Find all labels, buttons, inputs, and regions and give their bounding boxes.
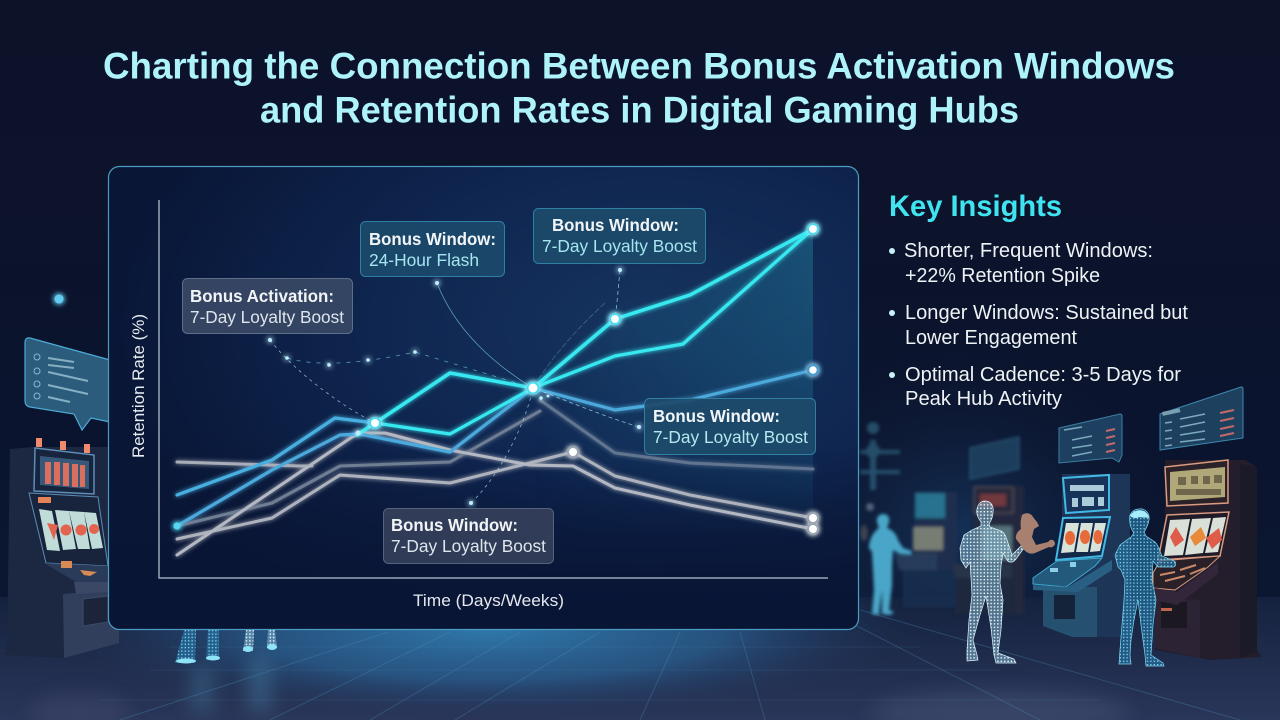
distant slot machines xyxy=(860,422,1024,614)
connector dots xyxy=(268,268,641,505)
orange slot machine xyxy=(1153,460,1262,660)
cyan machine deck xyxy=(1033,558,1102,587)
title: and Retention Rates in Digital Gaming Hubs xyxy=(260,90,1019,130)
cyan slot machine xyxy=(1033,474,1133,637)
heading: Key Insights xyxy=(889,190,1062,223)
callout: 7-Day bottom xyxy=(384,508,554,564)
callout: Bonus Activation xyxy=(182,278,352,334)
callout: 7-Day bottom: 7-Day Loyalty Boost xyxy=(391,536,546,556)
orange machine hologram screen xyxy=(1160,387,1243,450)
callout connectors xyxy=(270,270,639,503)
insight 1 xyxy=(889,240,1153,287)
brown figure xyxy=(1016,513,1055,554)
insight 1: +22% Retention Spike xyxy=(905,265,1100,287)
callout: 7-Day top: 7-Day Loyalty Boost xyxy=(542,236,697,256)
far cross hologram xyxy=(860,422,900,490)
callout: 24-Hour Flash xyxy=(360,222,504,276)
insight 3: Peak Hub Activity xyxy=(905,388,1062,410)
title xyxy=(103,46,1175,130)
orange machine deck xyxy=(1153,556,1220,590)
insight 2: Lower Engagement xyxy=(905,327,1077,349)
panel: chart xyxy=(108,166,858,630)
line: dark gray xyxy=(177,411,540,526)
floating light dot xyxy=(54,294,64,304)
x axis label: Time (Days/Weeks) xyxy=(413,592,564,610)
callout: Bonus Activation: Bonus Activation: xyxy=(190,286,334,306)
line: cyan low xyxy=(375,229,813,434)
data point markers xyxy=(174,224,818,534)
callout: 7-Day right: 7-Day Loyalty Boost xyxy=(653,427,808,447)
orange machine screen xyxy=(1165,460,1228,506)
insight 2: Longer Windows: Sustained but xyxy=(905,302,1188,324)
mid hologram screen xyxy=(970,437,1019,479)
line: blue xyxy=(177,370,813,526)
machine body xyxy=(3,447,119,658)
line: silver upper xyxy=(177,433,813,555)
callout: 24-Hour Flash: Bonus Window: xyxy=(369,229,496,249)
hologram figure: far left xyxy=(869,514,912,615)
far dots xyxy=(860,503,874,541)
callout: Bonus Activation: 7-Day Loyalty Boost xyxy=(190,307,344,327)
machine reels xyxy=(29,493,108,566)
mid machine xyxy=(952,486,1024,614)
y axis label: Retention Rate (%) xyxy=(130,314,148,458)
insight 3: Optimal Cadence: 3-5 Days for xyxy=(905,364,1181,386)
hologram figure: white xyxy=(960,501,1024,663)
machine lights xyxy=(36,438,90,453)
callout: 7-Day top: Bonus Window: xyxy=(552,215,679,235)
hologram figure: blue xyxy=(1115,509,1176,666)
title: Charting the Connection Between Bonus Activation Windows xyxy=(103,46,1175,86)
insight 2 xyxy=(889,302,1188,349)
chart area glow xyxy=(618,234,813,504)
callout: 7-Day right xyxy=(644,398,816,454)
callout: 7-Day top xyxy=(534,208,706,264)
line: silver lower xyxy=(177,452,813,539)
line: dark gray falling xyxy=(540,400,813,469)
chart axes xyxy=(159,200,828,578)
machine deck xyxy=(44,563,108,582)
line: cyan high xyxy=(357,229,813,435)
line: sky blue xyxy=(177,418,375,495)
line chart xyxy=(177,229,813,555)
callout: 7-Day bottom: Bonus Window: xyxy=(391,515,518,535)
cyan machine hologram screen xyxy=(1059,414,1122,463)
left slot machine xyxy=(3,438,119,658)
hologram legs under chart panel xyxy=(175,630,277,712)
cyan machine reels xyxy=(1056,517,1110,560)
insight 3 xyxy=(889,364,1181,410)
left hologram bubble xyxy=(25,338,110,430)
cyan machine screen xyxy=(1063,475,1109,513)
far machine xyxy=(895,492,957,607)
panel: key insights xyxy=(889,190,1188,410)
insight 1: Shorter, Frequent Windows: xyxy=(904,240,1153,262)
orange machine reels xyxy=(1158,512,1229,560)
callout: 7-Day right: Bonus Window: xyxy=(653,406,780,426)
callout: 24-Hour Flash: 24-Hour Flash xyxy=(369,250,479,270)
line: flat gray xyxy=(177,462,312,466)
machine screen xyxy=(34,448,94,494)
